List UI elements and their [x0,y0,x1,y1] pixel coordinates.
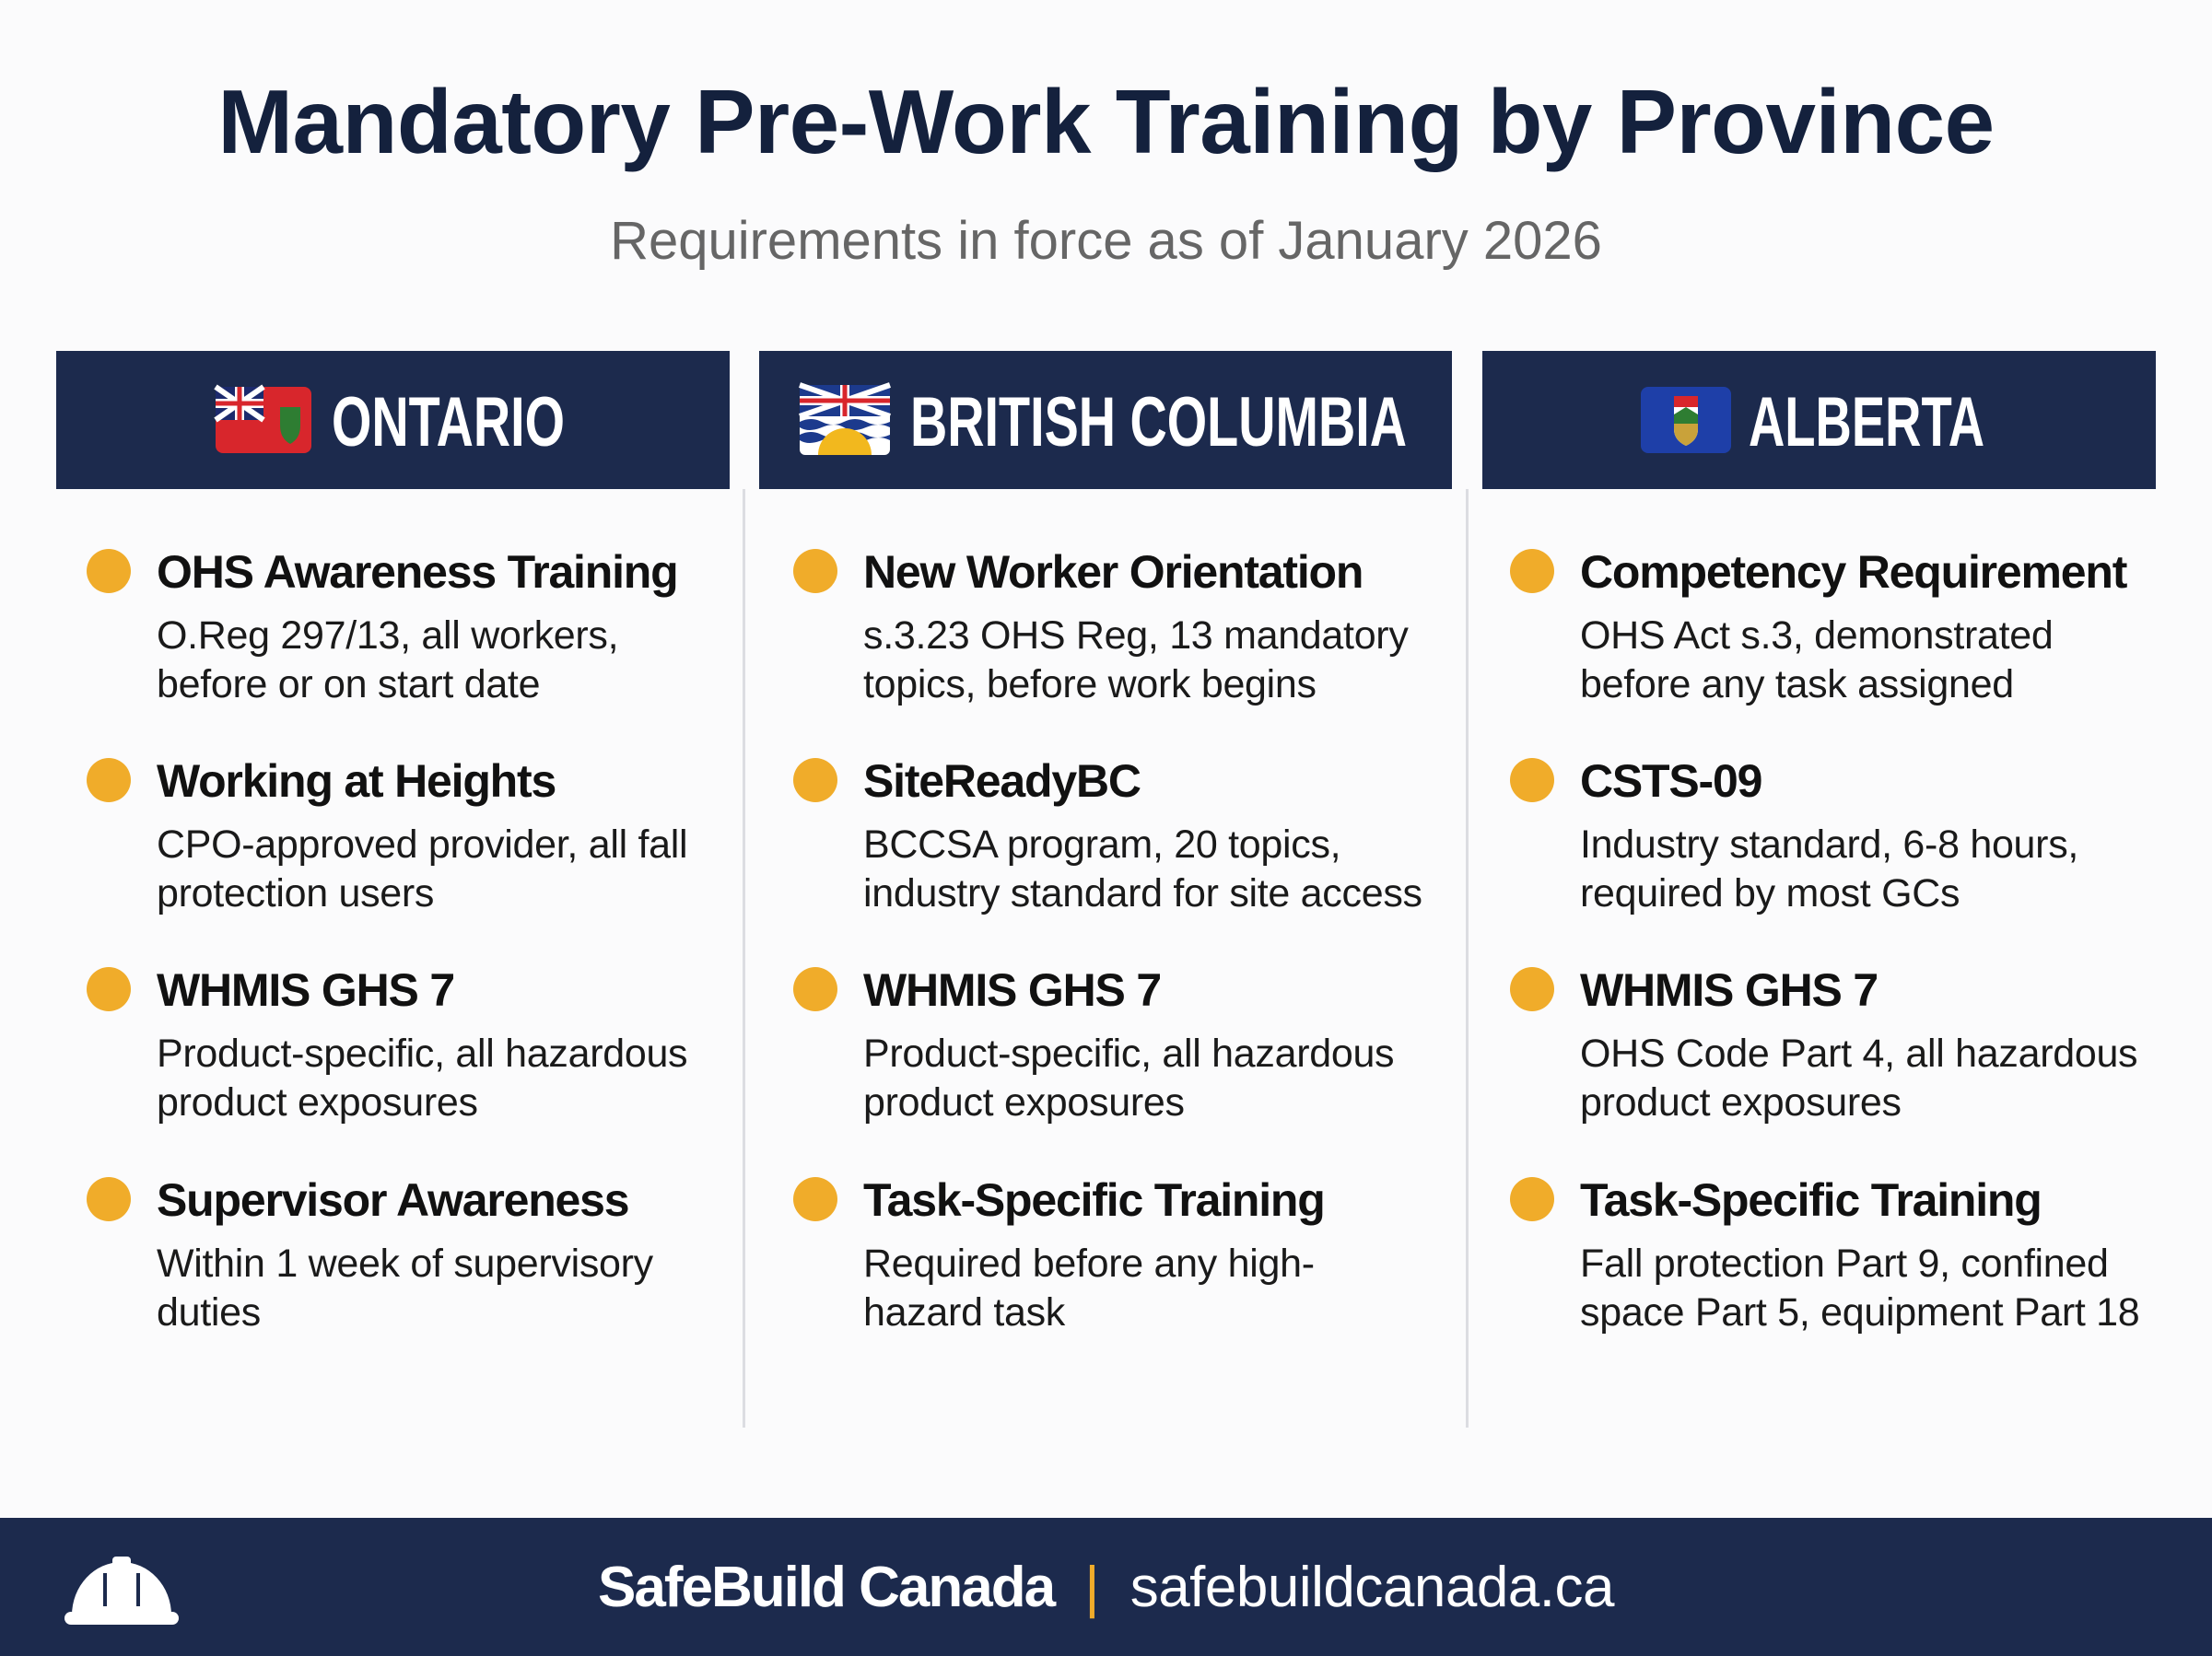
item: Task-Specific: Task-Specific Training [863,1174,1325,1226]
item: OHS Awareness [87,546,677,706]
item: Working at Heights [87,755,687,915]
header: Ontario [56,351,730,489]
item: Competency: Competency Requirement [1580,546,2126,598]
item: New Worker Orientation: New Worker Orientation [863,546,1363,598]
item: Task-Specific: Required before any high- [863,1242,1315,1286]
item: WHMIS: Product-specific, all hazardous [863,1032,1394,1076]
item: Competency: before any task assigned [1580,662,2014,706]
icon: BC flag [800,385,890,455]
item: SiteReadyBC: industry standard for site access [863,871,1422,915]
item: Supervisor Awareness [87,1174,653,1335]
item: CSTS-09: required by most GCs [1580,871,1960,915]
item: WHMIS: Product-specific, all hazardous [157,1032,687,1076]
item: Task-Specific: space Part 5, equipment Part 18 [1580,1290,2139,1335]
header text: Ontario: ONTARIO [332,383,565,461]
item: WHMIS [1510,964,2137,1125]
item: OHS Awareness: O.Reg 297/13, all workers, [157,613,618,658]
item: WHMIS [87,964,687,1125]
item: WHMIS [793,964,1394,1125]
item: WHMIS: WHMIS GHS 7 [1580,964,1878,1016]
icon: Ontario flag [216,387,311,453]
title: Mandatory Pre-Work Training by Province [217,71,1995,172]
footer [0,1518,2212,1656]
item: WHMIS: product exposures [863,1080,1185,1125]
item: Competency: OHS Act s.3, demonstrated [1580,613,2054,658]
header text: British Columbia: BRITISH COLUMBIA [910,383,1407,461]
icon: Alberta flag [1641,387,1731,453]
item: Supervisor Awareness: Within 1 week of supervisory [157,1242,653,1286]
item: Working at Heights: Working at Heights [157,755,556,807]
item: WHMIS: WHMIS GHS 7 [863,964,1161,1016]
item: Task-Specific [793,1174,1325,1335]
item: Working at Heights: protection users [157,871,434,915]
item: New Worker Orientation: s.3.23 OHS Reg, 13 mandatory [863,613,1409,658]
item: Task-Specific [1510,1174,2139,1335]
item: WHMIS: WHMIS GHS 7 [157,964,454,1016]
item: OHS Awareness: OHS Awareness Training [157,546,677,598]
item: SiteReadyBC: SiteReadyBC [863,755,1141,807]
header text: Alberta: ALBERTA [1749,383,1984,461]
header: British Columbia [759,351,1452,489]
item: OHS Awareness: before or on start date [157,662,540,706]
item: Task-Specific: hazard task [863,1290,1065,1335]
item: SiteReadyBC: BCCSA program, 20 topics, [863,822,1340,867]
panel: Ontario items [87,546,687,1335]
item: Task-Specific: Fall protection Part 9, confined [1580,1242,2109,1286]
header: Alberta [1482,351,2156,489]
item: Working at Heights: CPO-approved provider, all fall [157,822,687,867]
footer text: SafeBuild Canada | safebuildcanada.ca [598,1556,1614,1619]
header labels and flags [214,382,1984,461]
item: WHMIS: OHS Code Part 4, all hazardous [1580,1032,2137,1076]
item: CSTS-09: Industry standard, 6-8 hours, [1580,822,2078,867]
subtitle: Requirements in force as of January 2026 [610,211,1602,271]
panel: BC items [793,546,1422,1335]
item: CSTS-09 [1510,755,2078,915]
panel: Alberta items [1510,546,2139,1335]
item: Supervisor Awareness: duties [157,1290,261,1335]
item: WHMIS: product exposures [1580,1080,1902,1125]
item: Task-Specific: Task-Specific Training [1580,1174,2042,1226]
item: New Worker Orientation [793,546,1409,706]
icon: hard hat [64,1557,179,1625]
item: WHMIS: product exposures [157,1080,478,1125]
item: Supervisor Awareness: Supervisor Awareness [157,1174,628,1226]
item: New Worker Orientation: topics, before work begins [863,662,1317,706]
item: CSTS-09: CSTS-09 [1580,755,1761,807]
item: Competency [1510,546,2127,706]
item: SiteReadyBC [793,755,1422,915]
